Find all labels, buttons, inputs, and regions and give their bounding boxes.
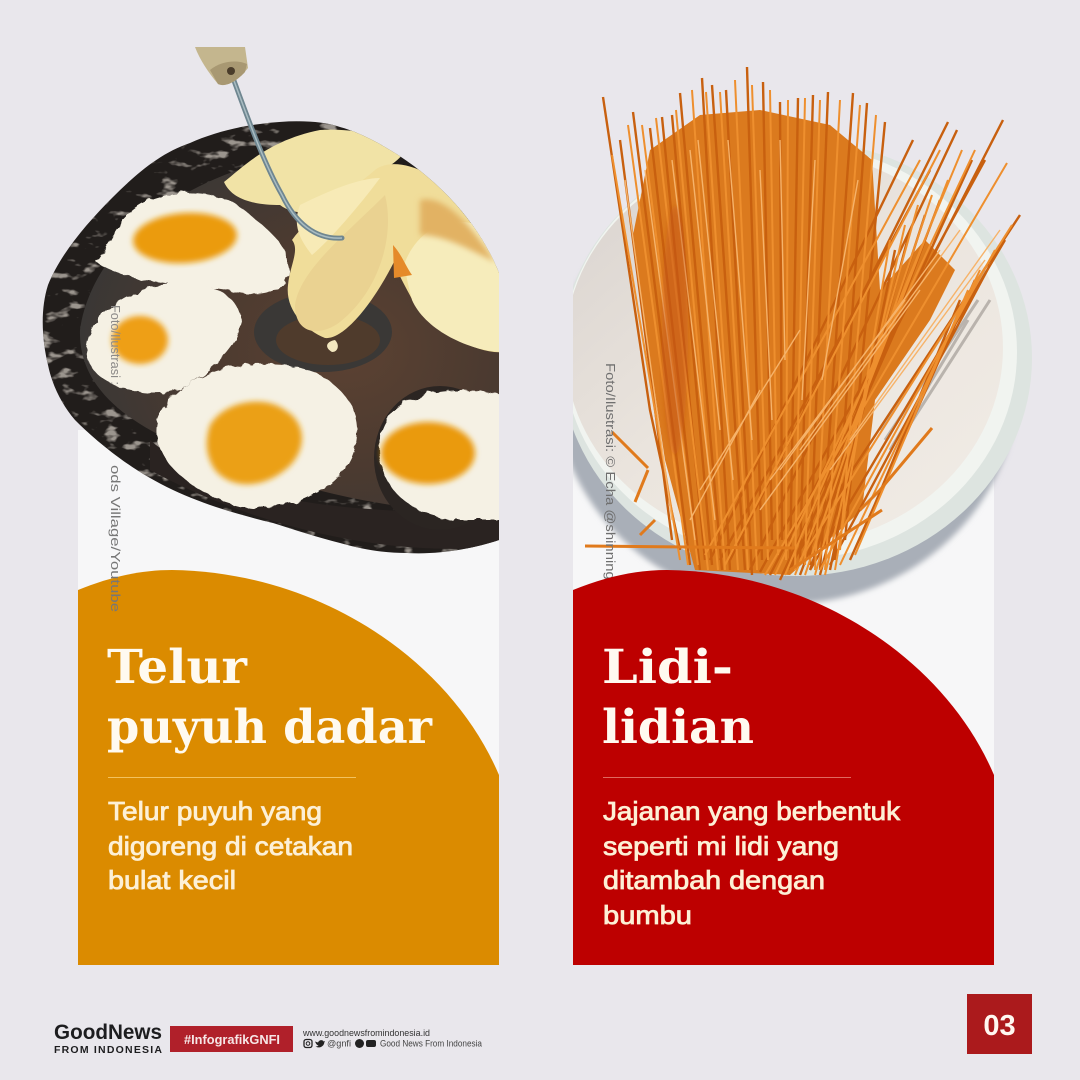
panel: telur puyuh dadar xyxy=(78,430,499,965)
lower rim dark xyxy=(150,440,510,549)
description right: bumbu xyxy=(603,900,692,930)
photo credit left lower: ods Village/Youtube xyxy=(108,465,123,612)
social handles xyxy=(327,1038,482,1048)
logo xyxy=(54,1021,162,1056)
noodles dark xyxy=(603,67,1020,580)
pan inner surface xyxy=(80,155,510,510)
fried egg whites xyxy=(86,193,505,520)
stray noodles xyxy=(585,428,932,570)
hashtag badge: #InfografikGNFI xyxy=(184,1032,280,1047)
noodle mass xyxy=(632,110,955,575)
heading right xyxy=(602,640,754,755)
heading left: Telur xyxy=(107,640,248,695)
description right: ditambah dengan xyxy=(603,865,825,895)
panel: lidi-lidian xyxy=(554,67,1032,965)
heading left xyxy=(107,640,433,755)
description right: seperti mi lidi yang xyxy=(603,831,839,861)
heading right: lidian xyxy=(602,700,754,755)
social handles: Good News From Indonesia xyxy=(380,1038,482,1048)
description right: Jajanan yang berbentuk xyxy=(603,796,901,826)
noodles light xyxy=(625,140,1000,540)
pocket right lower xyxy=(374,386,461,512)
divider right xyxy=(603,777,851,778)
noodle shadow strands xyxy=(880,270,990,450)
bowl and noodles photo xyxy=(554,67,1032,604)
description left: digoreng di cetakan xyxy=(108,831,353,861)
website: www.goodnewsfromindonesia.id xyxy=(302,1028,430,1039)
pan body xyxy=(30,110,510,560)
description left: Telur puyuh yang xyxy=(108,796,322,826)
card backing right xyxy=(573,400,994,965)
social icons xyxy=(304,1039,376,1048)
hashtag badge xyxy=(170,1026,293,1052)
photo: quail eggs on pan xyxy=(30,47,510,560)
heading right: Lidi- xyxy=(602,640,733,695)
description left xyxy=(108,796,353,895)
fritters xyxy=(224,130,505,352)
bowl shadow xyxy=(573,430,1010,605)
noodles bright xyxy=(612,80,1012,575)
yolks xyxy=(112,209,475,484)
social handles: @gnfi xyxy=(327,1038,351,1048)
red text panel right xyxy=(573,570,994,965)
orange text panel left xyxy=(78,570,499,965)
heading left: puyuh dadar xyxy=(107,700,433,755)
bowl rim xyxy=(560,140,1032,576)
divider left xyxy=(108,777,356,778)
page number badge xyxy=(967,994,1032,1054)
photo credit right: Foto/Ilustrasi: © Echa @shinningshop xyxy=(603,363,618,612)
chili powder patch xyxy=(662,205,688,455)
bowl inner xyxy=(565,150,1003,546)
card backing left xyxy=(78,430,499,965)
logo: GoodNews xyxy=(54,1021,162,1044)
description left: bulat kecil xyxy=(108,865,236,895)
photo credit left upper: Foto/Ilustrasi : xyxy=(108,305,123,385)
tool wire and handle xyxy=(195,47,342,238)
logo: FROM INDONESIA xyxy=(54,1044,162,1056)
footer branding xyxy=(54,1021,482,1056)
page number badge: 03 xyxy=(983,1010,1016,1042)
description right xyxy=(603,796,901,930)
hole xyxy=(254,292,392,372)
